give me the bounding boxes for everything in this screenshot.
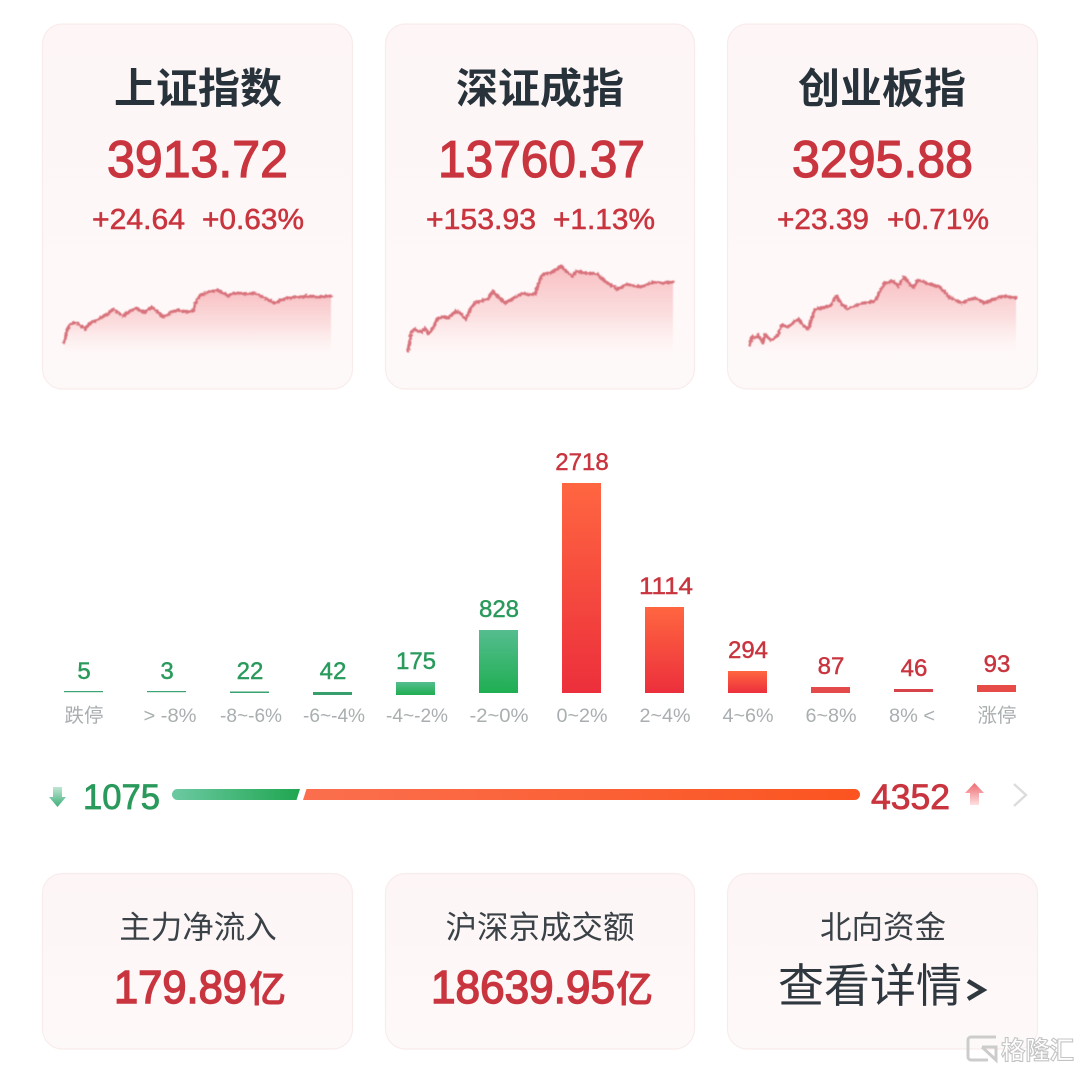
icon: link chevron — [968, 981, 983, 999]
panel: 深证成指 — [386, 24, 694, 389]
unit: 亿: 亿 — [249, 959, 286, 1013]
bar: -4~-2% — [386, 648, 448, 727]
bar: 8% < — [889, 655, 935, 727]
value: 3295.88: 3295.88 — [792, 131, 973, 189]
value: 13760.37: 13760.37 — [438, 131, 645, 189]
icon: up arrow — [965, 783, 984, 805]
heading: 创业板指: 创业板指 — [798, 55, 966, 115]
label: 沪深京成交额: 沪深京成交额 — [445, 902, 635, 948]
bar: -2~0% — [470, 596, 528, 727]
unit: 亿: 亿 — [616, 959, 653, 1013]
heading: 深证成指: 深证成指 — [456, 55, 624, 115]
panel: 主力净流入 — [42, 874, 352, 1049]
bar: -4~-2%: 175 — [396, 648, 436, 675]
label: 主力净流入: 主力净流入 — [119, 902, 277, 948]
bar: > -8%: > -8% — [144, 705, 196, 727]
bar: 0~2%: 2718 — [555, 449, 609, 476]
change: +24.64: +24.64 — [92, 204, 185, 236]
value: 3913.72: 3913.72 — [107, 131, 288, 189]
sparkline: 创业板指 — [750, 277, 1016, 354]
value: 18639.95亿: 18639.95 — [431, 961, 615, 1013]
bar: -8~-6% — [220, 658, 282, 727]
bar: 4~6%: 4~6% — [722, 705, 774, 727]
bar: 上涨 — [303, 789, 860, 800]
watermark: 格隆汇 — [968, 1031, 1074, 1067]
text: 格隆汇: 格隆汇 — [1001, 1031, 1074, 1067]
panel: 创业板指 — [728, 24, 1038, 389]
bar: 2~4%: 2~4% — [640, 705, 690, 727]
count: 4352 上涨: 4352 — [871, 778, 950, 817]
bar: 涨停: 涨停 — [977, 699, 1017, 728]
bar: 2~4% — [639, 573, 693, 727]
bar: 涨停: 93 — [984, 651, 1010, 678]
bar: -6~-4%: 42 — [320, 658, 346, 685]
bar: 涨停 — [977, 651, 1017, 728]
panel: 沪深京成交额 — [386, 874, 694, 1049]
label: 北向资金: 北向资金 — [820, 902, 946, 948]
change: +23.39: +23.39 — [777, 204, 869, 236]
sparkline: 深证成指 — [408, 266, 673, 357]
link: 查看详情: 查看详情 — [778, 950, 962, 1016]
bar: 6~8%: 87 — [818, 653, 844, 680]
bar: 下跌 — [172, 789, 300, 800]
bar: 8% <: 46 — [901, 655, 927, 682]
bar: -2~0%: -2~0% — [470, 705, 528, 727]
change: +153.93: +153.93 — [426, 204, 536, 236]
bar: 跌停 — [64, 658, 104, 728]
bar: -4~-2%: -4~-2% — [386, 705, 448, 727]
icon: down arrow — [49, 787, 66, 807]
panel: 上证指数 — [42, 24, 352, 389]
bar: > -8% — [144, 658, 196, 727]
bar: 0~2%: 0~2% — [556, 705, 608, 727]
count: 1075 下跌: 1075 — [83, 778, 160, 817]
bar: 8% <: 8% < — [889, 705, 935, 727]
bar: -6~-4% — [303, 658, 365, 727]
bar: 跌停: 5 — [77, 658, 91, 685]
bar chart: 涨跌分布 — [64, 449, 1017, 728]
bar: -8~-6%: 22 — [237, 658, 263, 685]
change percent: +0.63%: +0.63% — [202, 204, 304, 236]
bar: 4~6%: 294 — [728, 637, 768, 664]
bar: 6~8% — [806, 653, 856, 727]
sparkline: 上证指数 — [64, 290, 331, 355]
icon: watermark logo — [968, 1037, 996, 1060]
bar: -2~0%: 828 — [479, 596, 519, 623]
bar: 4~6% — [722, 637, 774, 727]
bar: 0~2% — [555, 449, 609, 727]
change percent: +1.13%: +1.13% — [553, 204, 655, 236]
panel: 北向资金 — [728, 874, 1038, 1049]
change percent: +0.71%: +0.71% — [887, 204, 989, 236]
bar: 6~8%: 6~8% — [806, 705, 856, 727]
summary: 涨跌家数 — [49, 778, 1026, 817]
icon: chevron — [1014, 784, 1026, 806]
bar: > -8%: 3 — [160, 658, 174, 685]
bar: 2~4%: 1114 — [639, 573, 693, 600]
heading: 上证指数: 上证指数 — [114, 55, 282, 115]
value: 179.89亿: 179.89 — [114, 961, 247, 1013]
bar: 跌停: 跌停 — [64, 699, 104, 728]
bar: -8~-6%: -8~-6% — [220, 705, 282, 727]
bar: -6~-4%: -6~-4% — [303, 705, 365, 727]
